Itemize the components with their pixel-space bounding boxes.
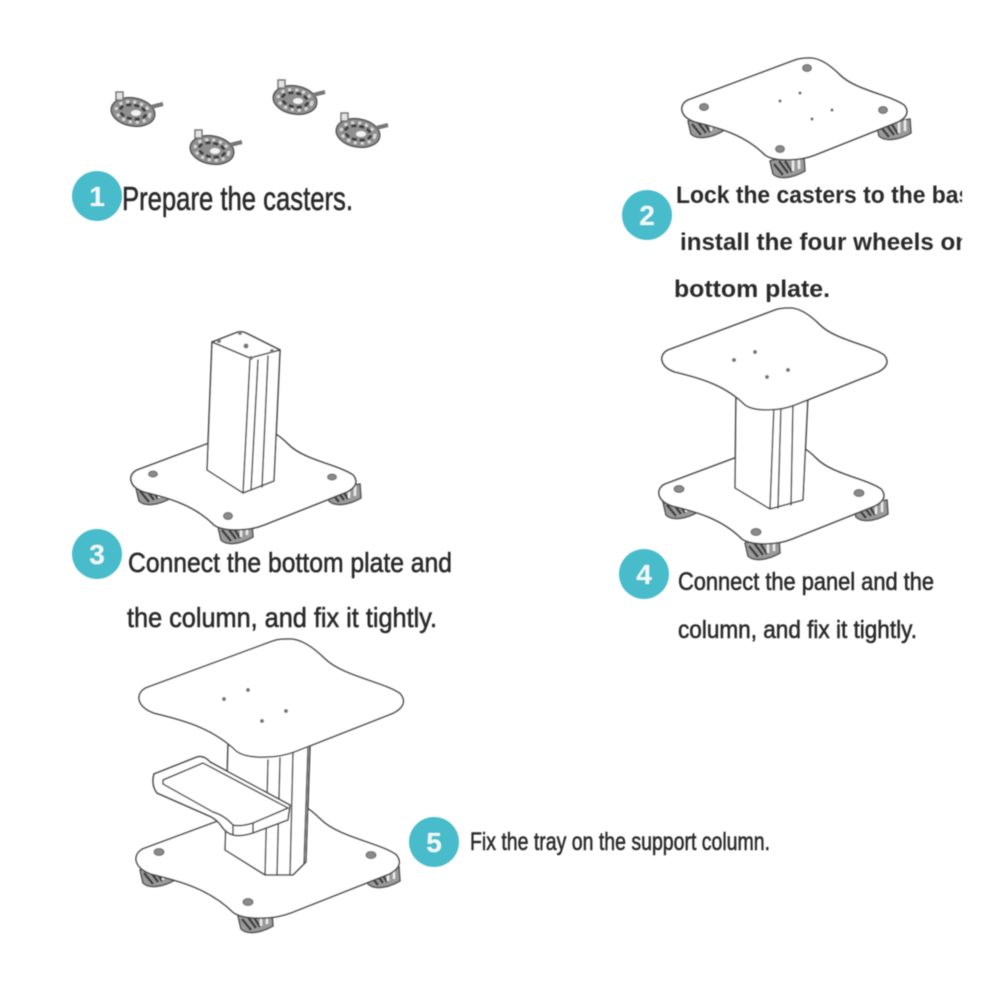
illustration: panel, column, plate [659,308,888,560]
badge 5 [409,817,459,867]
badge 2: 2 [639,200,655,231]
illustration: full cart with tray [136,639,403,933]
step 2 text: install the four wheels on [680,229,970,256]
step 3 text: Connect the bottom plate and [128,547,452,578]
badge 3 [72,529,122,579]
step 2: base plate with casters [622,58,984,303]
step 4: panel on column [619,308,934,644]
badge 4 [619,549,669,599]
step 3: column on bottom plate [72,331,452,633]
tray [153,757,290,836]
icon: four casters [109,80,388,168]
badge 5: 5 [426,827,442,858]
step 1: prepare the casters [72,80,388,221]
illustration: plate with wheels [682,58,911,178]
step 2 text: Lock the casters to the base [676,182,984,209]
badge 4: 4 [636,559,652,590]
step 2 text [674,182,984,303]
step 4 text: Connect the panel and the [678,568,934,596]
badge 1 [72,171,122,221]
step 4 text: column, and fix it tightly. [678,616,917,644]
badge 2 [622,190,672,240]
step 5: tray on column [136,639,770,933]
step 3 text: the column, and fix it tightly. [127,602,437,633]
step 2 text: bottom plate. [674,276,830,303]
badge 3: 3 [89,539,105,570]
step 1 text: Prepare the casters. [122,180,353,217]
badge 1: 1 [89,181,105,212]
step 4 text [678,568,934,644]
illustration: column and plate [131,331,361,544]
step 5 text: Fix the tray on the support column. [470,828,770,856]
step 3 text [127,547,452,633]
